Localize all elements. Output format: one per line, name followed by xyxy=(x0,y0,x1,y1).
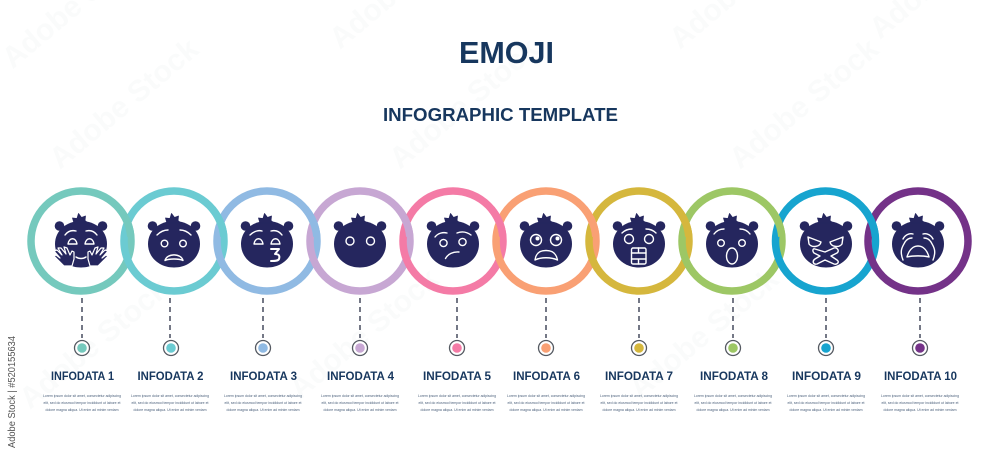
text block 3 xyxy=(224,393,302,412)
label: Infodata 7: INFODATA 7 xyxy=(605,369,673,383)
icon: rolling eyes face xyxy=(520,214,572,268)
text block 2: Lorem ipsum dolor sit amet, consectetur adipiscing xyxy=(131,393,209,398)
text block 8 xyxy=(694,393,772,412)
text block 10 xyxy=(881,393,959,412)
text block 6: dolore magna aliqua. Ut enim ad minim veniam xyxy=(510,407,583,412)
label: Infodata 2: INFODATA 2 xyxy=(138,369,204,383)
icon: frowning worried face xyxy=(148,214,200,268)
label: Infodata 1: INFODATA 1 xyxy=(51,369,114,383)
text block 2 xyxy=(131,393,209,412)
marker 8 xyxy=(726,340,740,356)
text block 6: Lorem ipsum dolor sit amet, consectetur adipiscing xyxy=(507,393,585,398)
label: Infodata 4: INFODATA 4 xyxy=(327,369,394,383)
text block 3: Lorem ipsum dolor sit amet, consectetur adipiscing xyxy=(224,393,302,398)
text block 7: elit, sed do eiusmod tempor incididunt ut labore et xyxy=(600,400,678,405)
marker 1 xyxy=(74,340,90,356)
text block 7: dolore magna aliqua. Ut enim ad minim veniam xyxy=(602,407,676,412)
label: Infodata 5: INFODATA 5 xyxy=(423,369,491,383)
text block 2: elit, sed do eiusmod tempor incididunt ut labore et xyxy=(132,400,209,405)
icon: confused face xyxy=(427,214,479,268)
text block 10: dolore magna aliqua. Ut enim ad minim veniam xyxy=(884,407,957,412)
marker 4 xyxy=(352,340,368,356)
text: Adobe Stock xyxy=(723,32,885,175)
icon: kissing face xyxy=(241,214,293,268)
marker 9 xyxy=(818,340,834,356)
marker 10 xyxy=(912,340,928,356)
subtitle: INFOGRAPHIC TEMPLATE xyxy=(383,104,618,125)
icon: loudly crying face xyxy=(892,214,944,268)
icon: smiling face with open hands xyxy=(54,214,108,268)
text block 5 xyxy=(418,393,496,412)
text block 9: dolore magna aliqua. Ut enim ad minim veniam xyxy=(790,407,863,412)
text block 4: elit, sed do eiusmod tempor incididunt ut labore et xyxy=(322,400,399,405)
label: Infodata 10: INFODATA 10 xyxy=(884,369,957,383)
text block 3: dolore magna aliqua. Ut enim ad minim veniam xyxy=(226,407,300,412)
icon: angry face with crossed mouth xyxy=(800,214,852,268)
text block 9: Lorem ipsum dolor sit amet, consectetur adipiscing xyxy=(787,393,865,398)
text: Adobe Stock xyxy=(383,32,545,175)
label: Infodata 6: INFODATA 6 xyxy=(513,369,580,383)
text: Adobe Stock xyxy=(283,262,445,405)
label: Infodata 8: INFODATA 8 xyxy=(700,369,768,383)
text: Adobe Stock xyxy=(623,262,785,405)
text block 9 xyxy=(787,393,865,412)
stock credit: Adobe Stock | #520155634 xyxy=(6,336,18,448)
icon: shouting face with teeth xyxy=(613,214,665,268)
label: Infodata 9: INFODATA 9 xyxy=(792,369,861,383)
text block 5: elit, sed do eiusmod tempor incididunt ut labore et xyxy=(418,400,496,405)
title: EMOJI xyxy=(459,35,554,70)
marker 3 xyxy=(256,340,270,356)
text block 8: Lorem ipsum dolor sit amet, consectetur adipiscing xyxy=(694,393,772,398)
marker 7 xyxy=(632,340,646,356)
text block 1 xyxy=(43,393,121,412)
text block 4: dolore magna aliqua. Ut enim ad minim veniam xyxy=(324,407,397,412)
label: Infodata 3: INFODATA 3 xyxy=(230,369,297,383)
icon: blank face xyxy=(334,214,386,268)
marker 6 xyxy=(538,340,554,356)
marker 5 xyxy=(450,340,464,356)
text block 6 xyxy=(507,393,585,412)
icon: surprised face xyxy=(706,214,758,268)
text block 8: dolore magna aliqua. Ut enim ad minim veniam xyxy=(696,407,770,412)
text block 10: Lorem ipsum dolor sit amet, consectetur adipiscing xyxy=(881,393,959,398)
text: Adobe Stock xyxy=(13,272,175,415)
text block 2: dolore magna aliqua. Ut enim ad minim veniam xyxy=(134,407,207,412)
text block 5: dolore magna aliqua. Ut enim ad minim veniam xyxy=(420,407,494,412)
text block 6: elit, sed do eiusmod tempor incididunt ut labore et xyxy=(508,400,585,405)
connector dashes xyxy=(82,298,920,338)
text: Adobe Stock xyxy=(43,32,205,175)
text block 8: elit, sed do eiusmod tempor incididunt ut labore et xyxy=(694,400,772,405)
text block 4: Lorem ipsum dolor sit amet, consectetur adipiscing xyxy=(321,393,399,398)
marker 2 xyxy=(164,340,178,356)
text block 1: dolore magna aliqua. Ut enim ad minim veniam xyxy=(46,407,119,412)
text block 7: Lorem ipsum dolor sit amet, consectetur adipiscing xyxy=(600,393,678,398)
text block 3: elit, sed do eiusmod tempor incididunt ut labore et xyxy=(224,400,302,405)
text block 1: elit, sed do eiusmod tempor incididunt ut labore et xyxy=(44,400,121,405)
text block 7 xyxy=(600,393,678,412)
text block 1: Lorem ipsum dolor sit amet, consectetur adipiscing xyxy=(43,393,121,398)
text block 10: elit, sed do eiusmod tempor incididunt ut labore et xyxy=(882,400,959,405)
text block 4 xyxy=(321,393,399,412)
text block 5: Lorem ipsum dolor sit amet, consectetur adipiscing xyxy=(418,393,496,398)
text block 9: elit, sed do eiusmod tempor incididunt ut labore et xyxy=(788,400,865,405)
interlocking rings xyxy=(31,191,968,291)
